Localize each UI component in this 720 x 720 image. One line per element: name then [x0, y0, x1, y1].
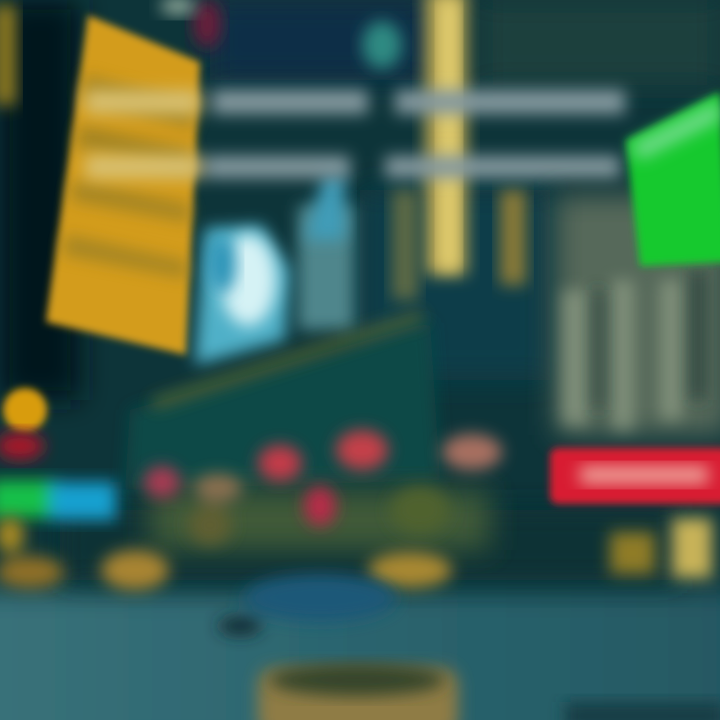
blurred headline text: [85, 90, 625, 179]
teal blob: [362, 21, 402, 69]
cream vertical tower: [392, 0, 526, 300]
yellow items on street: [0, 517, 452, 590]
green and blue strip: [0, 480, 116, 520]
dark green building: [125, 322, 440, 490]
red sign: [550, 448, 720, 504]
yellow goods right: [610, 518, 712, 578]
street: [0, 590, 720, 720]
red awning top: [193, 0, 221, 48]
blue figure: [218, 574, 396, 635]
yellow roof edge: [150, 312, 425, 408]
yellow billboard: [46, 15, 200, 355]
green sign: [626, 92, 720, 266]
yellow sign left strip: [0, 5, 16, 105]
crowd of people: [144, 430, 502, 550]
white awning top: [160, 0, 196, 15]
grey building right: [555, 195, 720, 435]
dark corner bottom right: [565, 702, 720, 720]
barrel foreground: [258, 664, 458, 720]
cyan building: [195, 170, 354, 365]
lower storefront band: [60, 510, 680, 580]
traffic light yellow and red: [0, 388, 47, 460]
